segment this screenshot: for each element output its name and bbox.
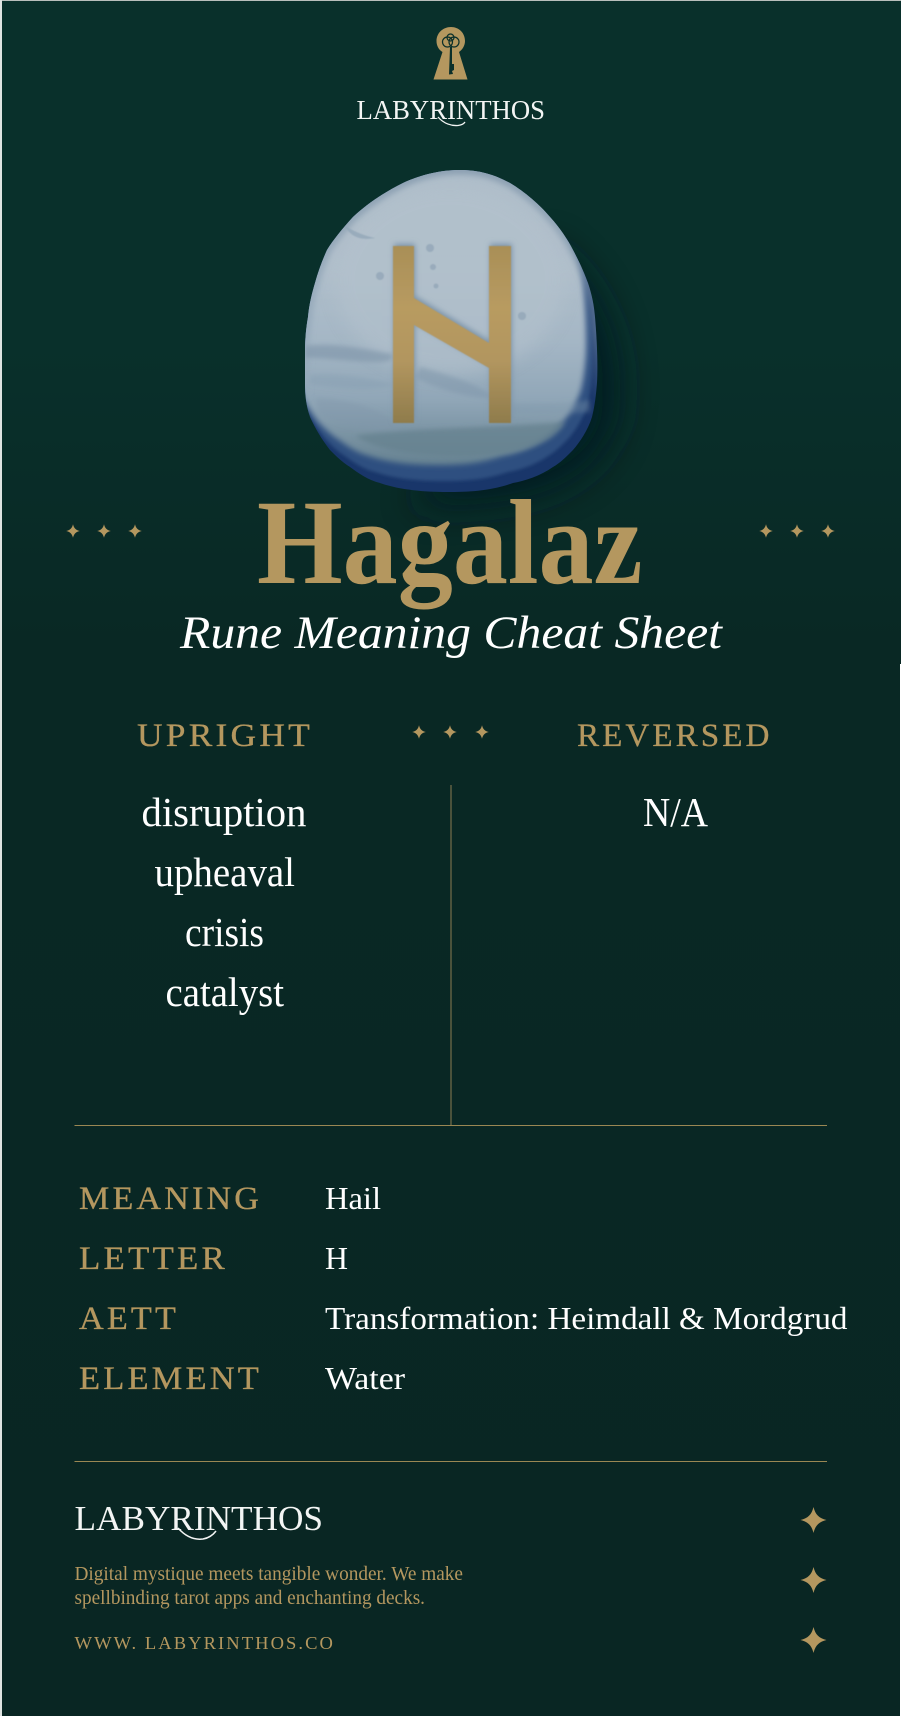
sparkles: right	[759, 524, 835, 538]
footer wordmark: LABYRINTHOS	[74, 1499, 323, 1538]
sparkles: middle	[412, 725, 489, 739]
stone clip group	[305, 170, 598, 492]
footer sparkles	[800, 1507, 826, 1653]
details labels: MEANING	[79, 1181, 262, 1217]
reversed keywords: N/A	[643, 789, 708, 835]
rune stone	[305, 170, 624, 508]
details values: Hail	[325, 1180, 381, 1216]
footer description: spellbinding tarot apps and enchanting decks.	[74, 1587, 425, 1609]
details values: Water	[325, 1360, 405, 1396]
footer description: Digital mystique meets tangible wonder. We make	[74, 1563, 463, 1585]
upright keywords: crisis	[185, 909, 264, 955]
subtitle: Rune Meaning Cheat Sheet	[179, 607, 723, 659]
stone bands	[305, 345, 590, 456]
details labels	[79, 1181, 262, 1397]
upright heading: UPRIGHT	[137, 718, 313, 754]
details labels: LETTER	[79, 1241, 228, 1277]
section rule	[74, 1125, 827, 1126]
logo wordmark: LABYRINTHOS	[356, 95, 545, 125]
rune glyph shadow	[394, 244, 512, 421]
footer description	[74, 1563, 463, 1609]
rune glyph	[393, 246, 511, 423]
upright keywords: catalyst	[166, 969, 285, 1015]
upright keywords	[142, 789, 306, 1015]
stone shadow	[410, 240, 620, 506]
details labels: ELEMENT	[79, 1361, 262, 1397]
upright keywords: upheaval	[154, 849, 295, 895]
reversed heading: REVERSED	[577, 718, 772, 754]
column divider	[450, 785, 452, 1126]
details labels: AETT	[79, 1301, 179, 1337]
footer url: WWW. LABYRINTHOS.CO	[74, 1633, 335, 1653]
title: Hagalaz	[257, 476, 642, 610]
logo: keyhole and key	[434, 27, 468, 80]
upright keywords: disruption	[142, 789, 306, 835]
sparkles: left	[66, 524, 142, 538]
footer rule	[74, 1461, 827, 1462]
details values: Transformation: Heimdall & Mordgrud	[325, 1300, 848, 1336]
details values: H	[325, 1240, 348, 1276]
details values	[325, 1180, 848, 1396]
